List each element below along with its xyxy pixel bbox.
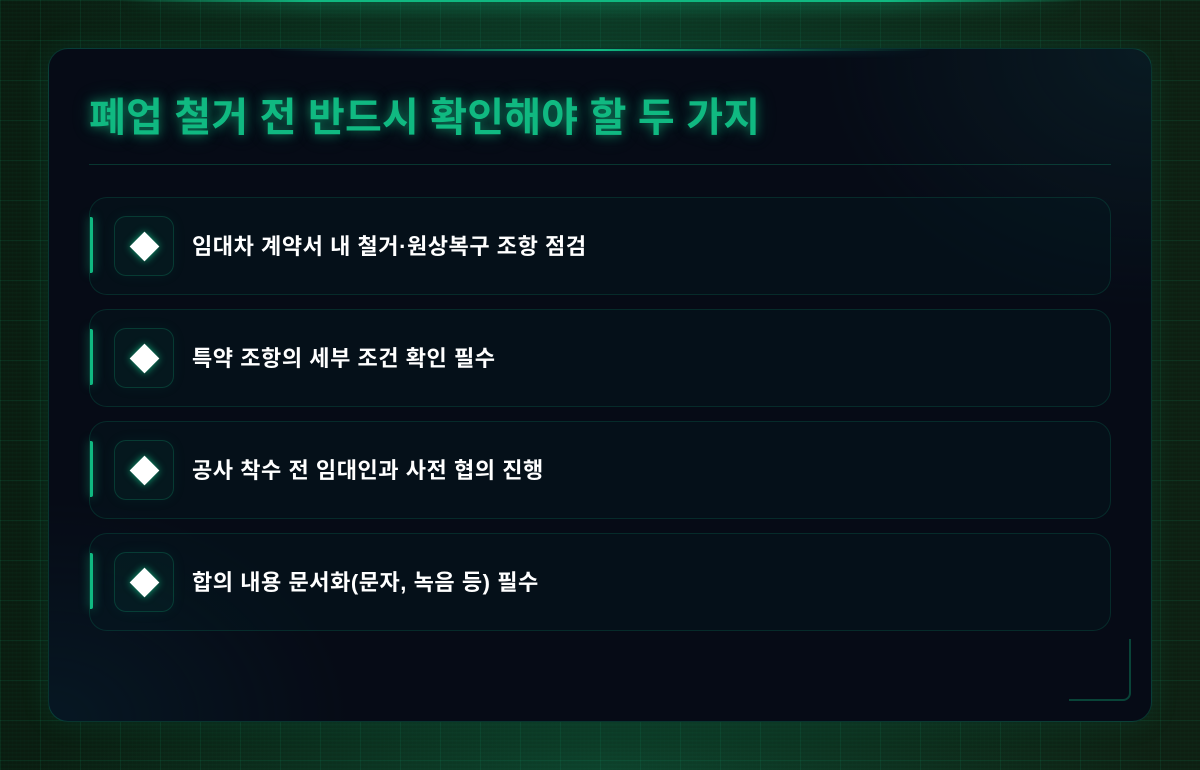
item text: 공사 착수 전 임대인과 사전 협의 진행 bbox=[192, 458, 544, 483]
icon: diamond bbox=[114, 328, 174, 388]
list item 2 bbox=[89, 309, 1111, 407]
corner bracket bbox=[1069, 639, 1131, 701]
accent bar bbox=[90, 553, 93, 609]
list item 4 bbox=[89, 533, 1111, 631]
top glowing bar bbox=[120, 0, 1080, 2]
title: 폐업 철거 전 반드시 확인해야 할 두 가지 bbox=[89, 96, 760, 140]
icon: diamond bbox=[114, 440, 174, 500]
card top glow line bbox=[269, 49, 931, 51]
accent bar bbox=[90, 441, 93, 497]
icon: diamond bbox=[114, 552, 174, 612]
top bar glow bbox=[170, 2, 1026, 15]
item text: 임대차 계약서 내 철거·원상복구 조항 점검 bbox=[192, 234, 587, 259]
item text: 특약 조항의 세부 조건 확인 필수 bbox=[192, 346, 496, 371]
accent bar bbox=[90, 217, 93, 273]
accent bar bbox=[90, 329, 93, 385]
list item 3 bbox=[89, 421, 1111, 519]
icon: diamond bbox=[114, 216, 174, 276]
item text: 합의 내용 문서화(문자, 녹음 등) 필수 bbox=[192, 570, 539, 595]
card top line glow bbox=[324, 51, 876, 57]
list item 1 bbox=[89, 197, 1111, 295]
